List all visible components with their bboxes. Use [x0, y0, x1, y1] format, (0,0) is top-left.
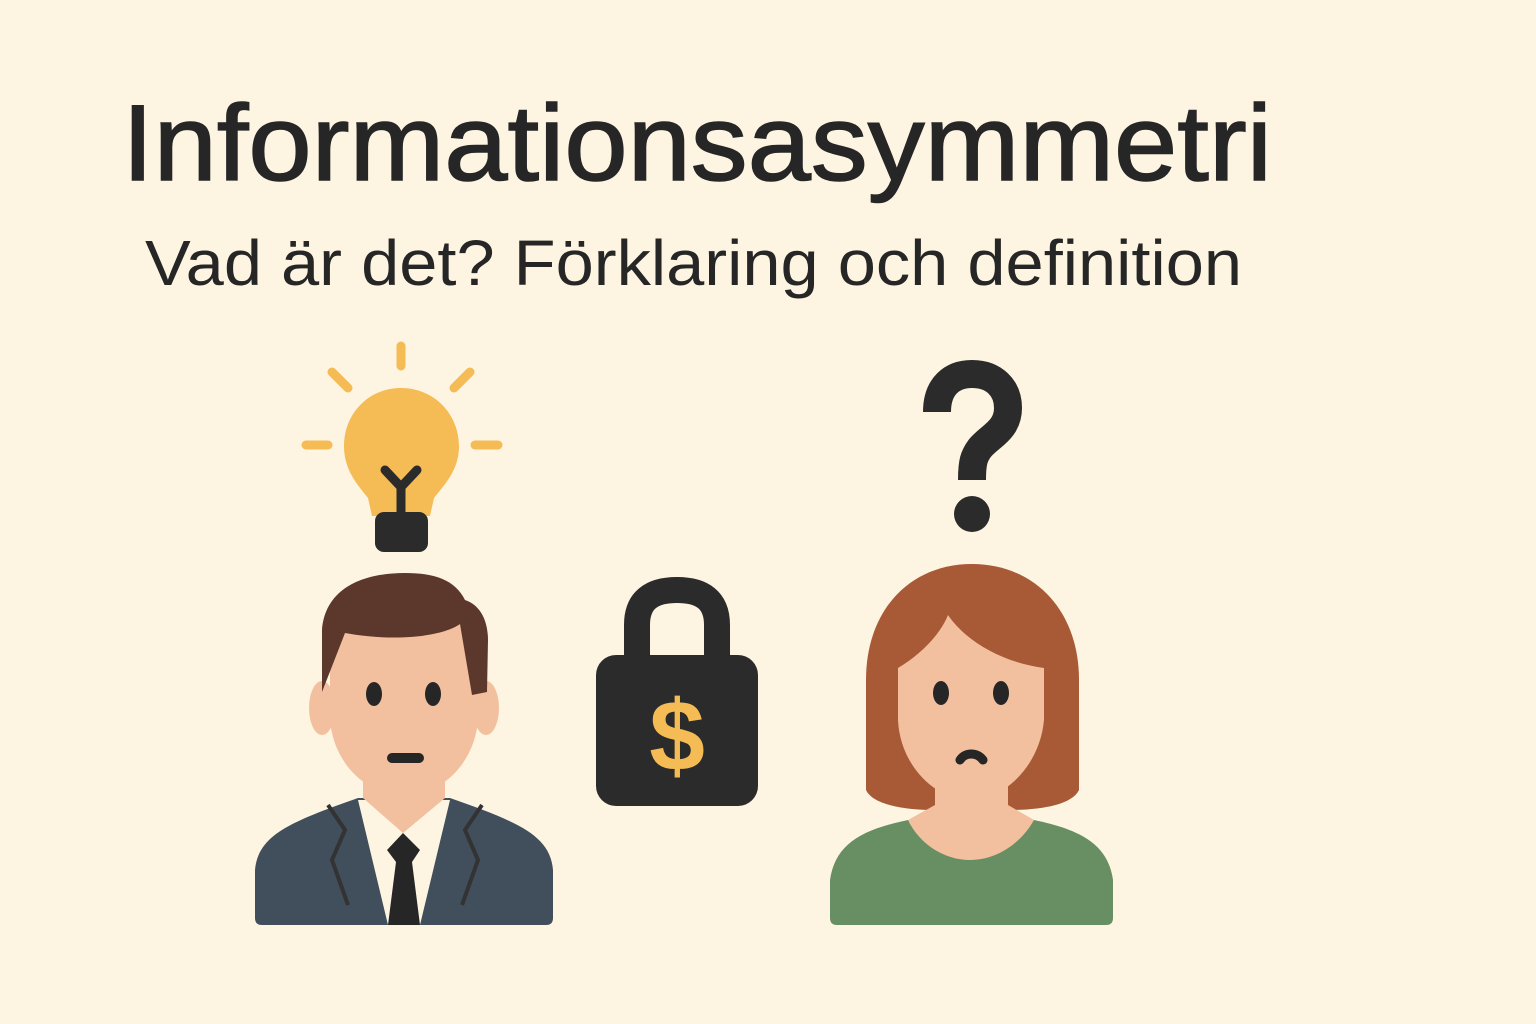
- neck: [908, 780, 1034, 860]
- hair: [322, 573, 488, 695]
- icon: lock with dollar: [596, 590, 758, 806]
- icon: lightbulb: [306, 346, 498, 552]
- face: [898, 615, 1044, 800]
- mouth: [392, 753, 419, 763]
- icon: question mark: [937, 374, 1008, 532]
- neck: [363, 770, 445, 833]
- tie: [387, 833, 420, 925]
- suit: [255, 798, 553, 925]
- body: [830, 820, 1113, 925]
- icon: lock with dollar: $: [649, 680, 705, 792]
- person: man (informed): [255, 573, 553, 925]
- subtitle: Vad är det? Förklaring och definition: [145, 227, 1242, 299]
- eyes: [366, 682, 382, 706]
- person: woman (uninformed): [830, 564, 1113, 925]
- mouth: [960, 754, 983, 760]
- shirt: [358, 800, 450, 925]
- ears: [309, 681, 335, 735]
- hair back: [866, 564, 1079, 810]
- eyes: [933, 681, 949, 705]
- face: [330, 610, 478, 795]
- title: Informationsasymmetri: [122, 82, 1272, 203]
